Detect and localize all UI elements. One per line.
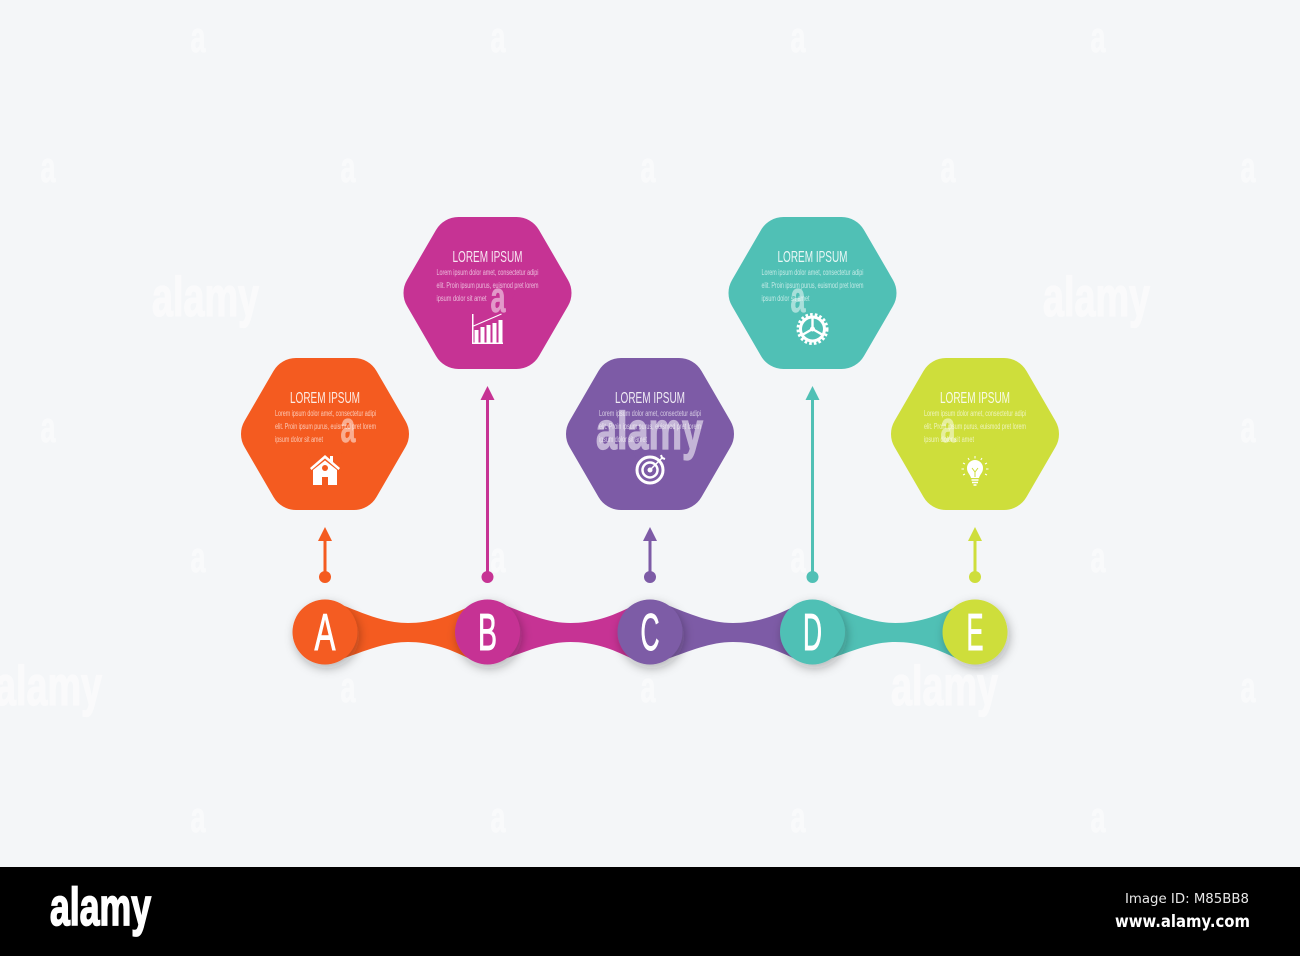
body text D: elit. Proin ipsum purus, euismod pret lorem: [762, 281, 864, 290]
watermark: small marks: a: [1240, 143, 1256, 192]
heading E: LOREM IPSUM: [940, 390, 1010, 407]
timeline: [292, 600, 1008, 664]
body text A: elit. Proin ipsum purus, euismod pret lorem: [275, 422, 376, 431]
heading B: LOREM IPSUM: [452, 249, 522, 266]
watermark: small marks: a: [490, 793, 506, 842]
watermark: small marks: a: [490, 13, 506, 62]
body text E: Lorem ipsum dolor amet, consectetur adipi: [924, 409, 1026, 418]
image id: Image ID: M85BB8: [1125, 891, 1249, 907]
body text B: elit. Proin ipsum purus, euismod pret lorem: [436, 281, 539, 290]
watermark: small marks: a: [640, 663, 656, 712]
footer bar: [0, 867, 1300, 956]
watermark: small marks: a: [490, 273, 506, 322]
node B: B: [478, 604, 497, 662]
heading A: LOREM IPSUM: [290, 390, 360, 407]
node A: A: [314, 604, 336, 662]
heading D: LOREM IPSUM: [778, 249, 848, 266]
node B: [455, 600, 520, 664]
node E: [942, 600, 1008, 664]
arrow C: [643, 527, 657, 583]
watermark: large marks: alamy: [152, 265, 259, 328]
arrow E: [968, 527, 982, 583]
watermark: small marks: a: [190, 13, 206, 62]
body text E: elit. Proin ipsum purus, euismod pret lorem: [924, 422, 1026, 431]
node C: [618, 600, 682, 664]
icon: gear: [798, 314, 827, 344]
body text C: [599, 409, 701, 444]
body text A: Lorem ipsum dolor amet, consectetur adipi: [275, 409, 376, 418]
watermark: large marks: alamy: [596, 402, 703, 461]
body text A: [275, 409, 376, 444]
panel A: orange hexagon: [267, 384, 383, 485]
body text E: [924, 409, 1026, 444]
icon: house: [310, 455, 340, 485]
body text D: ipsum dolor sit amet: [762, 294, 810, 303]
watermark: small marks: a: [940, 143, 956, 192]
watermark: small marks: a: [40, 143, 56, 192]
watermark: small marks: a: [790, 273, 806, 322]
watermark: small marks: a: [640, 143, 656, 192]
connector B-C: [504, 605, 632, 659]
watermark: small marks: a: [490, 533, 506, 582]
watermark: small marks: a: [940, 403, 956, 452]
node E: E: [966, 604, 984, 662]
body text B: ipsum dolor sit amet: [436, 294, 487, 303]
watermark: small marks: a: [190, 533, 206, 582]
watermark: large marks: [0, 265, 1150, 717]
panel B: magenta hexagon: [430, 243, 546, 344]
body text C: Lorem ipsum dolor amet, consectetur adipi: [599, 409, 701, 418]
icon: bar chart: [472, 314, 503, 344]
arrow B: [480, 386, 494, 583]
connector C-D: [667, 605, 795, 659]
watermark: small marks: a: [1240, 663, 1256, 712]
watermark: small marks: a: [1090, 533, 1106, 582]
watermark: small marks: a: [790, 13, 806, 62]
icon: target: [637, 455, 665, 483]
node D: D: [803, 604, 822, 662]
panel E: lime hexagon: [917, 384, 1033, 485]
node A: [292, 600, 358, 664]
connector A-B: [342, 605, 470, 659]
body text D: [762, 268, 864, 303]
body text C: ipsum dolor sit amet: [599, 435, 648, 444]
heading C: LOREM IPSUM: [615, 390, 685, 407]
body text C: elit. Proin ipsum purus, euismod pret lorem: [599, 422, 701, 431]
body text B: Lorem ipsum dolor amet, consectetur adipi: [436, 268, 539, 277]
node C: C: [640, 604, 660, 662]
watermark: small marks: a: [1240, 403, 1256, 452]
watermark: small marks: a: [1090, 793, 1106, 842]
watermark: large marks: alamy: [891, 654, 998, 717]
panel C: purple hexagon: [592, 384, 708, 484]
watermark: small marks: a: [340, 403, 356, 452]
watermark: small marks: a: [790, 533, 806, 582]
watermark: small marks: a: [1090, 13, 1106, 62]
connector D-E: [830, 605, 958, 659]
footer logo: alamy: [50, 878, 151, 937]
node D: [780, 600, 845, 664]
body text D: Lorem ipsum dolor amet, consectetur adipi: [762, 268, 864, 277]
website: www.alamy.com: [1115, 912, 1250, 931]
body text B: [436, 268, 539, 303]
watermark: small marks: a: [340, 143, 356, 192]
arrow A: [318, 527, 332, 583]
watermark: small marks: a: [340, 663, 356, 712]
watermark: small marks: a: [40, 403, 56, 452]
watermark: small marks: a: [190, 793, 206, 842]
watermark: large marks: alamy: [1043, 265, 1150, 328]
icon: light bulb: [962, 456, 988, 485]
watermark: small marks: a: [790, 793, 806, 842]
panel D: teal hexagon: [754, 243, 870, 344]
body text A: ipsum dolor sit amet: [275, 435, 324, 444]
body text E: ipsum dolor sit amet: [924, 435, 975, 444]
arrow D: [806, 386, 820, 583]
